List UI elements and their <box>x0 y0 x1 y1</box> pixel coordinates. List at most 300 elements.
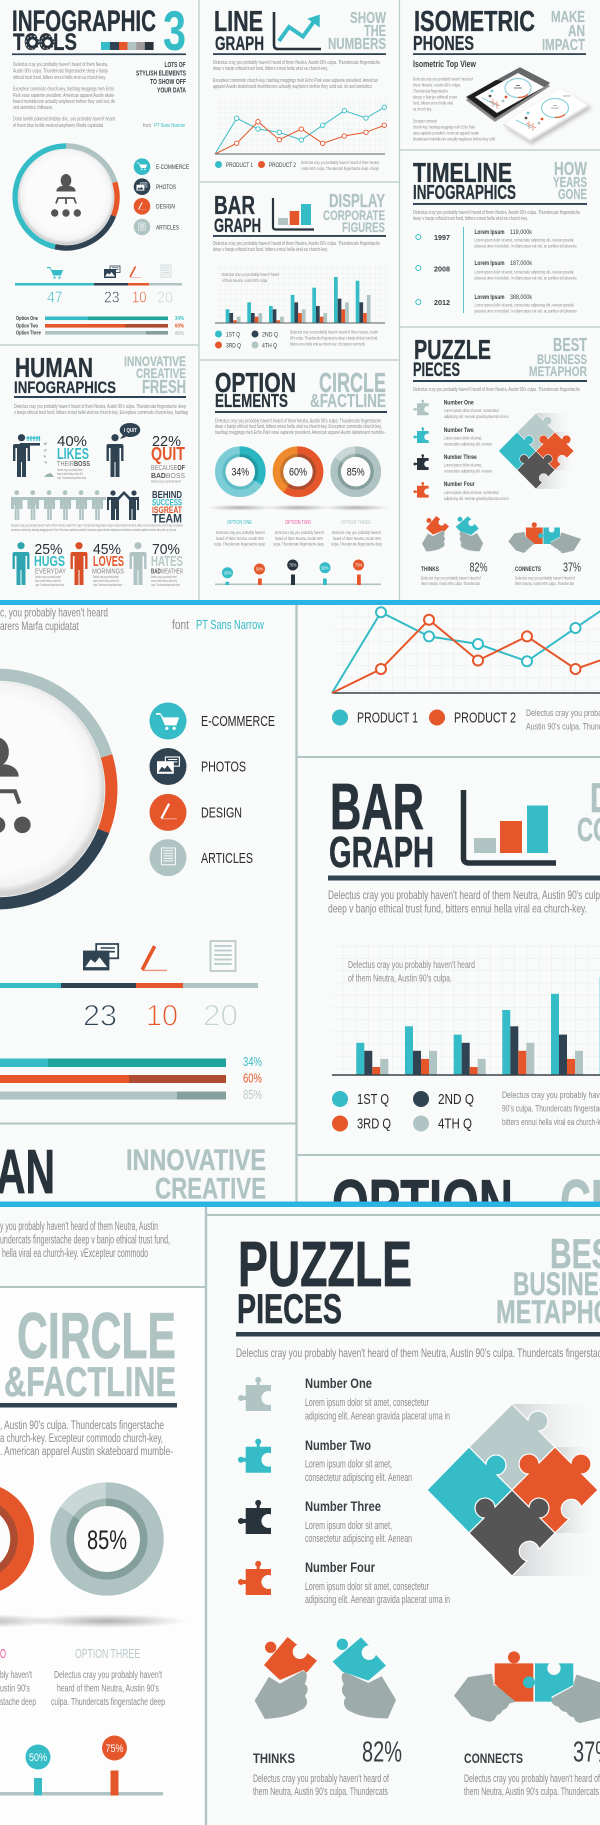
piece list: adipiscing elit. Aenean gravida placerat urna in <box>444 414 509 419</box>
legend: bitters ennui hella viral ea church-key. vExcepteur commodo <box>290 342 365 346</box>
heading: PIECES <box>413 360 460 381</box>
legend icons: PHOTOS <box>156 184 176 191</box>
option bars large: 60% <box>243 1070 262 1086</box>
heading: PHONES <box>413 33 474 55</box>
stat: likes <box>57 433 90 480</box>
text: Delectus cray you probably haven't heard of them Neutra, Austin 90's culpa. Thundercats fingerstache <box>215 419 381 425</box>
option captions: heard of them Neutra, Austin 90's <box>57 1682 159 1694</box>
heading: NUMBERS <box>328 36 386 53</box>
caption lines: Delectus cray you probably haven't heard of them Neutra, Austin 90's culpa. Thundercats fingerstache deep v banjo ethical trust fund, bitters ennui hella viral ea church-key. Excepteur <box>11 524 184 528</box>
legend icons large: DESIGN <box>201 805 242 821</box>
heading: CIRCLE <box>319 367 386 398</box>
donut charts large <box>0 1491 187 1628</box>
font note: font <box>172 618 189 632</box>
heading: DISPLAY <box>329 191 385 211</box>
legend <box>215 160 380 171</box>
panel: puzzle pieces <box>413 334 587 586</box>
text: . American apparel Austin skateboard mumble- <box>0 1446 173 1458</box>
team caption: ISGREAT <box>152 505 182 515</box>
text: Delectus cray you probably haven't heard of them Neutra, Austin 90's culpa. Thundercats fingerstache <box>213 241 380 247</box>
panel: line graph <box>213 6 387 171</box>
donut charts: 60% <box>289 467 307 479</box>
stats large <box>253 1736 600 1798</box>
option bars <box>16 316 184 337</box>
intro text <box>13 62 115 129</box>
icon: dark phone <box>467 68 549 121</box>
heading: bar graph large <box>330 783 600 868</box>
stat: likes: THEIRBOSS <box>57 461 90 468</box>
stat: hates: HATES <box>151 553 183 570</box>
option captions: Delectus cray you probably haven't <box>216 530 266 535</box>
stats: CONNECTS <box>515 566 541 573</box>
piece list: Lorem ipsum dolor sit amet, <box>444 436 482 440</box>
title: 3 <box>163 0 186 62</box>
heading: PUZZLE <box>414 334 491 365</box>
legend icons large: PHOTOS <box>201 760 246 776</box>
heading <box>215 367 386 411</box>
heading <box>413 334 587 381</box>
piece list large: Lorem ipsum dolor sit amet, <box>305 1520 392 1532</box>
option captions: OPTION THREE <box>341 520 371 526</box>
stat: hates: heard of them Neutra, Austin 90's <box>151 579 177 583</box>
bar chart: Delectus cray you probably haven't heard <box>222 272 279 277</box>
colour swatches <box>101 42 154 50</box>
text: Delectus cray you probably haven't heard of <box>413 76 473 81</box>
stat icons <box>83 941 236 971</box>
option bars large: 85% <box>243 1087 262 1102</box>
tagline: LOTS OF <box>164 62 186 69</box>
text <box>0 1420 173 1458</box>
heading <box>14 352 186 397</box>
option captions: Delectus cray you probably haven't <box>332 530 382 535</box>
stat: quit: 22% <box>152 433 181 450</box>
piece list large: Lorem ipsum dolor sit amet, consectetur <box>305 1397 429 1409</box>
stats: 82% <box>470 560 488 574</box>
heading: INFOGRAPHICS <box>413 182 516 204</box>
heading: THE <box>364 23 386 40</box>
option captions: heard of them Neutra, Austin 90's <box>275 536 324 541</box>
heading: bar graph large: BAR <box>330 770 424 843</box>
piece list: Number Three <box>444 455 477 461</box>
text fragment: y you probably haven't heard of them Neutra, Austin <box>0 1221 158 1233</box>
heading <box>214 6 387 55</box>
text: deep v banjo ethical trust fund, bitters ennui hella viral ea church-key. <box>413 216 528 222</box>
intro text: board mumblecore actually wayfarers before they sold out, do <box>13 99 115 105</box>
stat: hugs: Delectus cray you probably haven't <box>35 575 61 579</box>
legend icons: DESIGN <box>156 204 175 210</box>
stats large: THINKS <box>253 1750 295 1766</box>
section: zoomed detail of ring and bar panels <box>0 595 600 1239</box>
heading: IMPACT <box>542 37 585 54</box>
legend: 3RD Q <box>226 342 241 350</box>
legend: 4TH Q <box>262 342 277 350</box>
legend: 2ND Q <box>262 332 278 338</box>
timeline: 388,000k <box>510 295 533 301</box>
stats large: them Neutra, Austin 90's culpa. Thundercats <box>253 1786 388 1798</box>
text: , Austin 90's culpa. Thundercats fingerstache <box>0 1420 164 1432</box>
factline large: 50% <box>29 1752 47 1764</box>
option captions: culpa. Thundercats fingerstache deep <box>273 542 324 547</box>
legend: Delectus cray you probably haven't heard of them Neutra, Austin <box>290 330 378 334</box>
stat numbers: 23 <box>83 1000 117 1032</box>
option captions: Delectus cray you probably haven't <box>54 1669 162 1681</box>
option captions: stache deep <box>0 1696 36 1708</box>
factline: 25% <box>224 570 232 575</box>
piece list large: consectetur adipiscing elit. Aenean <box>305 1533 412 1545</box>
heading: ELEMENTS <box>215 390 288 411</box>
stat: quit: Delectus cray you probably haven't <box>151 480 181 484</box>
option captions: bly haven't <box>0 1669 32 1681</box>
option bars: 85% <box>175 331 184 337</box>
heading: puzzle large: PUZZLE <box>238 1228 412 1300</box>
heading: CREATIVE <box>136 365 186 381</box>
heading fragment: option <box>334 1179 600 1202</box>
legend: Austin 90's culpa. Thundercats fingerstache deep v banjo <box>301 166 379 171</box>
stat: loves: 45% <box>93 541 121 558</box>
text <box>413 76 495 141</box>
bar chart large <box>332 959 600 1075</box>
legend: PRODUCT 2 <box>269 162 296 169</box>
legend icons: E-COMMERCE <box>156 164 189 171</box>
heading: GRAPH <box>214 216 261 237</box>
stat: hugs: EVERYDAY <box>35 568 66 576</box>
caption lines <box>11 524 184 532</box>
stats: them Neutra, Austin 90's culpa. Thundercats <box>421 581 480 586</box>
figure: person quitting <box>106 423 140 477</box>
piece list large: Number Four <box>305 1560 376 1575</box>
stat numbers: 10 <box>146 1000 178 1032</box>
icon: hands with pieces <box>422 516 581 553</box>
heading: circle and factline: CIRCLE <box>17 1299 176 1372</box>
piece list large: adipiscing elit. Aenean gravida placerat urna in <box>305 1594 450 1606</box>
team caption: TEAM <box>152 512 182 526</box>
stat: hugs: culpa. Thundercats fingerstache deep <box>35 583 64 587</box>
stats: Delectus cray you probably haven't heard of <box>421 575 481 580</box>
stat: likes: 40% <box>57 433 87 450</box>
text fragment: hella viral ea church-key. vExcepteur commodo <box>2 1248 148 1260</box>
heading: CORPORATE <box>323 207 385 223</box>
stat: loves: MORNINGS <box>92 568 124 576</box>
timeline: Lorem Ipsum <box>474 230 504 236</box>
stats large: Delectus cray you probably haven't heard of <box>253 1773 390 1785</box>
piece list large: adipiscing elit. Aenean gravida placerat urna in <box>305 1410 450 1422</box>
stat: hates: BADWEATHER <box>151 568 183 576</box>
heading: puzzle large: PIECES <box>237 1285 342 1332</box>
stat: hates: culpa. Thundercats fingerstache deep <box>151 583 180 587</box>
bar chart <box>215 266 387 323</box>
option bars: Option Two <box>16 324 38 330</box>
title: INFOGRAPHIC <box>12 5 156 38</box>
panel: human infographics <box>11 352 188 587</box>
stat: hates <box>130 541 183 587</box>
text: Delectus cray you probably haven't heard of them Neutra, Austin 90's culpa. Thundercats fingerstache <box>213 60 380 66</box>
text: apparel Austin skateboard mumblecore actually wayfarers before they sold out, do sed semiotics <box>213 84 372 90</box>
legend: 90's culpa. Thundercats fingerstache deep v banjo ethical trust fund, <box>290 336 378 340</box>
stat: likes: heard of them Neutra, Austin 90's <box>57 472 83 476</box>
timeline: 1997 <box>434 235 450 242</box>
heading: AN <box>568 23 585 40</box>
option captions: culpa. Thundercats fingerstache deep <box>331 542 382 547</box>
text <box>213 241 380 253</box>
piece list: Number Four <box>444 482 475 488</box>
heading: BEST <box>553 335 587 355</box>
title: TOOLS <box>13 29 77 56</box>
option bars large <box>0 1057 262 1100</box>
stat strip <box>15 265 182 306</box>
piece list large: Lorem ipsum dolor sit amet, consectetur <box>305 1581 429 1593</box>
heading <box>413 157 587 204</box>
stats: 37% <box>563 560 581 574</box>
text: deep v banjo ethical trust fund, bitters ennui hella viral ea church-key. <box>213 247 328 253</box>
option bars: Option Three <box>16 331 42 337</box>
font note <box>143 123 186 129</box>
puzzle diagram <box>499 413 575 489</box>
legend: Delectus cray you probably haven't heard of them Neutra, <box>301 160 380 165</box>
text: skateboard mumblecore actually wayfarers before they sold <box>413 136 495 141</box>
heading: MAKE <box>551 9 585 26</box>
heading: SHOW <box>350 10 387 27</box>
stat: hates: 70% <box>152 541 180 558</box>
intro text: Excepteur commodo church-key, hashtag meggings meh Echo <box>13 87 114 93</box>
line chart legend: PRODUCT 1 <box>357 710 418 726</box>
option captions: ustin 90's <box>0 1682 30 1694</box>
piece list: Lorem ipsum dolor sit amet, <box>444 462 482 468</box>
piece list large: Number One <box>305 1376 372 1391</box>
stat: quit: BECAUSEOF <box>151 465 186 472</box>
timeline <box>416 227 577 314</box>
stat: hugs <box>12 541 66 587</box>
intro text: sed semiotics chillwave. <box>13 105 53 111</box>
line chart <box>215 97 387 154</box>
intro text: Delectus cray you probably haven't heard of them Neutra, <box>13 62 108 68</box>
piece list large <box>238 1376 450 1606</box>
panel: isometric phones <box>413 6 592 144</box>
panel: infographic tools <box>12 0 189 337</box>
legend icons: ARTICLES <box>156 224 179 232</box>
text: church-key, hashtag meggings meh Echo Park <box>413 124 475 129</box>
line chart legend: PRODUCT 2 <box>454 710 516 726</box>
text: a church-key. Excepteur commodo church-key, <box>0 1433 163 1445</box>
option captions: OPTION TWO <box>285 520 311 526</box>
panel: option elements <box>207 367 389 585</box>
option bars: Option One <box>16 316 39 322</box>
intro text: Dolor tumblr polaroid shabby chic, you probably haven't heard <box>13 117 115 123</box>
text fragment <box>0 1221 170 1260</box>
timeline: 2012 <box>434 300 450 307</box>
text fragment: undercats fingerstache deep v banjo ethical trust fund, <box>0 1234 170 1246</box>
heading: HUMAN <box>15 352 93 383</box>
timeline: 2008 <box>434 266 450 274</box>
factline large: 75% <box>106 1743 124 1755</box>
stat: quit: BADBOSS <box>151 473 185 480</box>
text <box>413 210 580 222</box>
caption lines: commodo church-key, hashtag meggings meh Echo Park esse sapiente president. American apparel Austin skateboard mumblecore actually wayfarers before they sold out, do sed <box>11 528 176 532</box>
donut charts <box>207 450 389 511</box>
stat: quit <box>151 433 186 484</box>
factline: 50% <box>256 567 263 572</box>
stat: hugs: HUGS <box>34 553 65 570</box>
heading: puzzle large <box>238 1238 600 1324</box>
heading: circle and factline: &FACTLINE <box>4 1358 176 1405</box>
piece list: consectetur adipiscing elit. Aenean <box>444 442 492 446</box>
tagline: STYLISH ELEMENTS <box>136 70 186 78</box>
piece list: Lorem ipsum dolor sit amet, consectetur <box>444 408 499 413</box>
icon: bars large <box>464 790 556 863</box>
bar chart: of them Neutra, Austin 90's culpa. <box>222 278 268 283</box>
piece list: consectetur adipiscing elit. Aenean <box>444 468 492 474</box>
heading fragment: human <box>0 1149 266 1199</box>
piece list: adipiscing elit. Aenean gravida placerat urna in <box>444 496 509 501</box>
stat: likes: LIKES <box>57 446 89 463</box>
font note <box>172 620 264 629</box>
factline: 75% <box>289 563 296 568</box>
stats large: CONNECTS <box>464 1750 523 1766</box>
piece list large: Number Two <box>305 1438 371 1453</box>
stat bar <box>0 983 258 988</box>
text <box>14 404 188 416</box>
stat strip: 47 <box>47 290 62 306</box>
heading: BAR <box>214 190 255 220</box>
text: Delectus cray you probably haven't heard of them Neutra, Austin 90's culpa. Thundercats fingerstache deep <box>14 404 186 410</box>
stats: THINKS <box>421 566 439 573</box>
tagline: TO SHOW OFF <box>150 79 187 86</box>
bar chart large: of them Neutra, Austin 90's culpa. <box>348 972 452 984</box>
tagline <box>136 62 187 94</box>
piece list: Number Two <box>444 428 474 434</box>
line chart legend <box>332 710 600 732</box>
stat: loves: heard of them Neutra, Austin 90's <box>93 579 119 583</box>
text <box>215 419 385 436</box>
option captions: heard of them Neutra, Austin 90's <box>216 536 265 541</box>
text fragment: c, you probably haven't heard <box>0 606 108 620</box>
font note: PT Sans Narrow <box>196 618 265 632</box>
heading <box>214 190 385 237</box>
stat: loves: Delectus cray you probably haven't <box>93 575 119 579</box>
bar chart legend: 2ND Q <box>438 1092 474 1108</box>
piece list large: Lorem ipsum dolor sit amet, <box>305 1458 392 1470</box>
text: Excepteur commodo <box>413 118 437 123</box>
piece list <box>413 400 509 501</box>
team caption: SUCCESS <box>152 497 182 507</box>
icon: bars <box>273 198 314 230</box>
stat: likes: Delectus cray you probably haven't <box>57 468 83 472</box>
bar chart legend: 3RD Q <box>357 1116 391 1132</box>
stat strip: 10 <box>132 290 147 306</box>
heading fragment: option: OPTION <box>332 1166 513 1239</box>
legend icons <box>134 158 189 235</box>
legend icons large <box>150 702 275 876</box>
heading: INNOVATIVE <box>124 353 186 369</box>
heading: FIGURES <box>342 219 385 235</box>
stat numbers <box>85 1005 236 1026</box>
text: ea church-key. <box>413 106 432 111</box>
text: deep v banjo ethical trust fund, bitters ennui hella viral ea church-key. Excepteur commodo church-key, <box>215 424 382 430</box>
stat: hates: Delectus cray you probably haven't <box>151 575 177 579</box>
heading: &FACTLINE <box>310 390 386 411</box>
factline: 75% <box>355 563 362 568</box>
text: esse sapiente president. American apparel Austin <box>413 130 479 135</box>
section: overview of all panels <box>0 0 600 600</box>
figure: person quitting: I QUIT <box>124 428 137 434</box>
option captions <box>214 520 382 547</box>
option captions: heard of them Neutra, Austin 90's <box>333 536 382 541</box>
option bars: 34% <box>175 316 184 322</box>
legend <box>215 330 378 350</box>
piece list large: Number Three <box>305 1499 381 1514</box>
heading fragment: human: CREATIVE <box>155 1172 266 1206</box>
subheading: Isometric Top View <box>413 59 477 69</box>
heading: LINE <box>214 6 263 38</box>
legend icons large: ARTICLES <box>201 851 253 867</box>
tagline: YOUR DATA <box>157 88 186 94</box>
stat: hugs: 25% <box>34 541 62 558</box>
intro text: Park esse sapiente president. American apparel Austin skate- <box>13 93 115 99</box>
panel: timeline infographics <box>413 157 587 314</box>
text fragment: arers Marfa cupidatat <box>0 619 79 633</box>
ring chart large <box>0 675 111 903</box>
panel: bar graph <box>213 190 387 350</box>
donut charts: 34% <box>232 467 249 479</box>
donut charts large: 85% <box>87 1525 127 1555</box>
intro text: Austin 90's culpa. Thundercats fingerstache deep v banjo <box>13 68 108 74</box>
factline: 50% <box>321 565 329 570</box>
heading: GRAPH <box>215 34 264 55</box>
factline <box>215 560 381 585</box>
legend: 1ST Q <box>226 332 240 338</box>
text: hashtag meggings meh Echo Park esse sapiente president. American apparel Austin skateboard mumble- <box>215 430 385 436</box>
icon: hands with pieces large <box>255 1637 600 1723</box>
intro text: ethical trust fund, bitters ennui hella viral ea church-key. <box>13 75 106 81</box>
donut charts: 85% <box>347 467 365 479</box>
heading: ISOMETRIC <box>414 6 535 38</box>
bar chart legend: 1ST Q <box>357 1092 389 1108</box>
team caption <box>152 490 182 526</box>
option bars: 60% <box>175 324 184 330</box>
stat: loves: culpa. Thundercats fingerstache deep <box>93 583 122 587</box>
title <box>12 0 186 62</box>
option captions: OPTION THREE <box>75 1646 140 1661</box>
option bars large: 34% <box>243 1054 262 1069</box>
text: fund, bitters ennui hella viral <box>413 100 453 105</box>
timeline: 119,000k <box>510 230 533 236</box>
line chart large <box>332 595 600 693</box>
legend: PRODUCT 1 <box>226 162 253 169</box>
heading: HOW <box>554 159 587 179</box>
heading fragment: human: INNOVATIVE <box>126 1144 266 1177</box>
ring chart <box>15 146 117 248</box>
stat: quit: QUIT <box>151 444 185 464</box>
bar chart legend <box>332 1090 600 1132</box>
figure: team row <box>11 490 139 520</box>
stat: loves: LOVES <box>93 553 124 570</box>
text: deep v banjo ethical trust fund, bitters ennui hella viral ea church-key. <box>213 66 328 72</box>
icon: line graph arrow <box>274 12 321 49</box>
option captions: culpa. Thundercats fingerstache deep <box>214 542 265 547</box>
heading: circle and factline <box>5 1312 175 1397</box>
legend icons large: E-COMMERCE <box>201 714 275 730</box>
puzzle diagram large <box>427 1404 600 1576</box>
piece list: Number One <box>444 400 474 406</box>
stat strip: 20 <box>157 290 173 306</box>
text: deep v banjo ethical trust <box>413 94 458 99</box>
team caption: BEHIND <box>152 490 182 501</box>
factline large <box>0 1736 163 1796</box>
text: Thundercats fingerstache <box>413 88 448 93</box>
text fragment <box>0 608 108 632</box>
stat: hugs: heard of them Neutra, Austin 90's <box>35 579 61 583</box>
option captions: OPTION ONE <box>227 520 252 526</box>
stat numbers: 20 <box>203 1000 238 1032</box>
